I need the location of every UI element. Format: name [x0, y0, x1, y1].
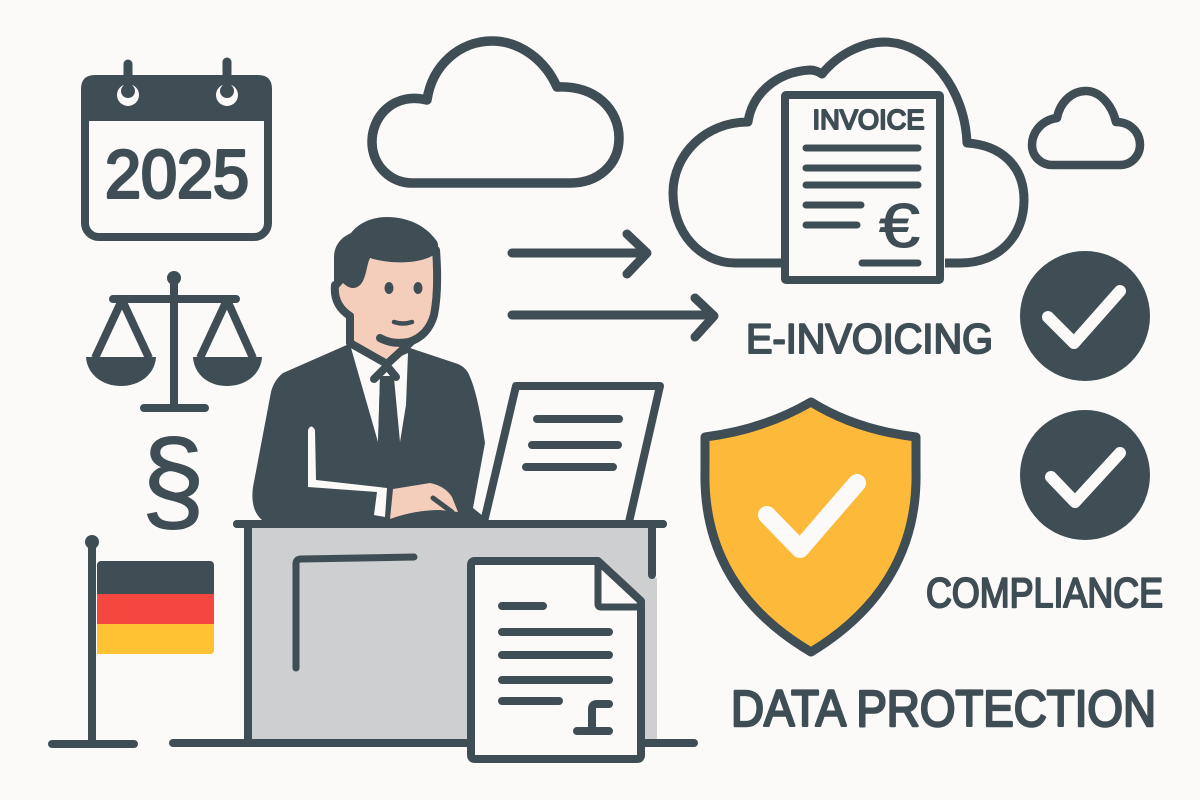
- calendar year: 2025: [105, 136, 249, 212]
- suit: [252, 344, 488, 520]
- icon: paragraph sign: §: [141, 417, 205, 545]
- icon: small cloud: [1032, 91, 1140, 165]
- arrow: upper: [512, 234, 647, 274]
- laptop screen: [237, 386, 663, 524]
- label: e-invoicing: E-INVOICING: [746, 315, 993, 362]
- desk: [173, 524, 694, 743]
- icon: calendar 2025: [81, 62, 272, 237]
- head outline: [335, 250, 437, 379]
- document with stamp: [471, 561, 641, 759]
- invoice heading: INVOICE: [812, 104, 924, 135]
- neck and face: [338, 256, 434, 363]
- euro sign: €: [879, 192, 920, 261]
- icon: scales of justice: [86, 271, 262, 408]
- icon: empty cloud: [372, 41, 619, 183]
- icon: cloud with invoice: [673, 42, 1024, 280]
- mouth: [394, 322, 412, 324]
- label: data protection: DATA PROTECTION: [731, 680, 1156, 737]
- icon: check circle upper: [1020, 251, 1150, 381]
- hand: [390, 483, 458, 519]
- shirt: [351, 348, 408, 442]
- arrow: lower: [512, 298, 714, 337]
- hair: [334, 217, 438, 293]
- label: compliance: COMPLIANCE: [926, 569, 1163, 616]
- arm highlight: [308, 426, 387, 517]
- icon: check circle lower: [1020, 410, 1150, 540]
- eyes: [384, 282, 394, 294]
- icon: yellow shield with check: [705, 402, 916, 652]
- tie: [378, 376, 398, 443]
- icon: German flag: [52, 535, 214, 744]
- person at desk: [252, 217, 488, 520]
